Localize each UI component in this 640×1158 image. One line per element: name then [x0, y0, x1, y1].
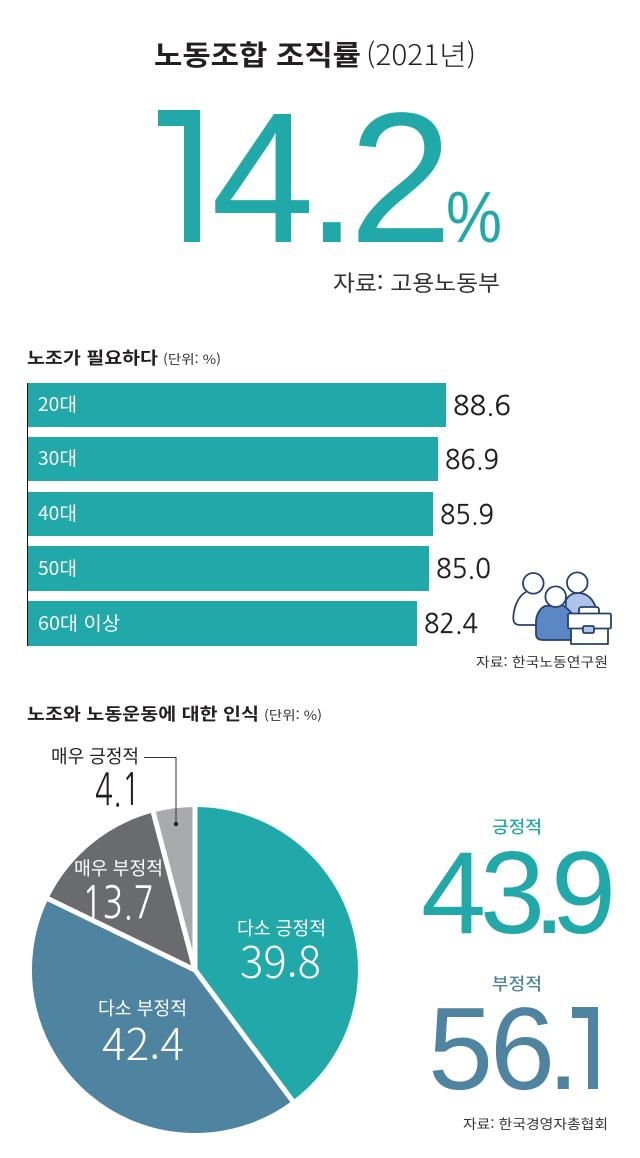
label: very negative: 13.7 [82, 881, 154, 925]
bar: 60s and over: 60대 이상 [38, 609, 120, 636]
bar: 20s [28, 383, 511, 427]
summary: negative: 56. [428, 983, 580, 1114]
slice: somewhat positive [195, 804, 361, 1103]
label: very negative: 매우 부정적 [74, 855, 163, 881]
bar: 30s [28, 437, 499, 481]
bar: 60s and over: 82.4 [424, 610, 478, 637]
bar: 50s: 85.0 [436, 555, 491, 582]
label: somewhat negative: 42.4 [102, 1009, 184, 1073]
title: (2021년) [366, 34, 476, 74]
big number: 14.2%: 4.2 [211, 75, 452, 282]
bar: 20s: 88.6 [453, 392, 511, 419]
big number: 14.2%: 1 [132, 75, 235, 282]
bar: 60s and over [28, 601, 478, 646]
label: very positive with leader line: 4.1 [95, 768, 140, 812]
big number: 14.2% [158, 110, 500, 242]
label: somewhat positive: 다소 긍정적 [237, 915, 326, 941]
heading: perception of unions: (단위: %) [264, 705, 322, 724]
bar: 50s [28, 546, 491, 591]
heading: perception of unions [27, 700, 322, 725]
slice: very positive [153, 804, 195, 970]
slice: very negative [46, 810, 195, 970]
bar chart: age groups [27, 383, 511, 646]
bar: 40s: 40대 [38, 499, 77, 526]
bar: 50s: 50대 [38, 554, 77, 581]
axis [27, 383, 28, 646]
label: very positive with leader line: 매우 긍정적 [51, 743, 139, 769]
label: somewhat negative: 다소 부정적 [98, 995, 187, 1021]
source: ministry of labor: 자료: 고용노동부 [333, 266, 500, 298]
bar: 20s: 20대 [38, 390, 77, 417]
summary: negative: 1 [555, 983, 620, 1114]
label: very positive with leader line [51, 743, 178, 826]
bar: 30s: 30대 [38, 444, 77, 471]
bar: 30s: 86.9 [445, 446, 499, 473]
source: employers federation: 자료: 한국경영자총협회 [463, 1113, 608, 1133]
heading: union needed [27, 344, 221, 369]
source: korea labor institute: 자료: 한국노동연구원 [476, 651, 608, 671]
summary: negative: 부정적 [492, 970, 542, 995]
heading: union needed: (단위: %) [163, 349, 221, 368]
summary: positive: 긍정적 [492, 813, 542, 838]
big number: 14.2%: % [446, 178, 502, 258]
title [154, 34, 476, 74]
heading: perception of unions: 노조와 노동운동에 대한 인식 [27, 700, 259, 725]
summary: positive: 43.9 [421, 827, 616, 958]
label: somewhat positive: 39.8 [240, 927, 321, 991]
bar: 40s [28, 492, 494, 536]
bar: 40s: 85.9 [440, 501, 494, 528]
label: very negative [74, 855, 163, 925]
title: 노동조합 조직률 [154, 34, 361, 74]
icon: workers with briefcase [513, 572, 611, 644]
pie chart [29, 804, 361, 1136]
summary: negative [432, 976, 598, 1090]
heading: union needed: 노조가 필요하다 [27, 344, 158, 369]
slice: somewhat negative [29, 898, 294, 1136]
